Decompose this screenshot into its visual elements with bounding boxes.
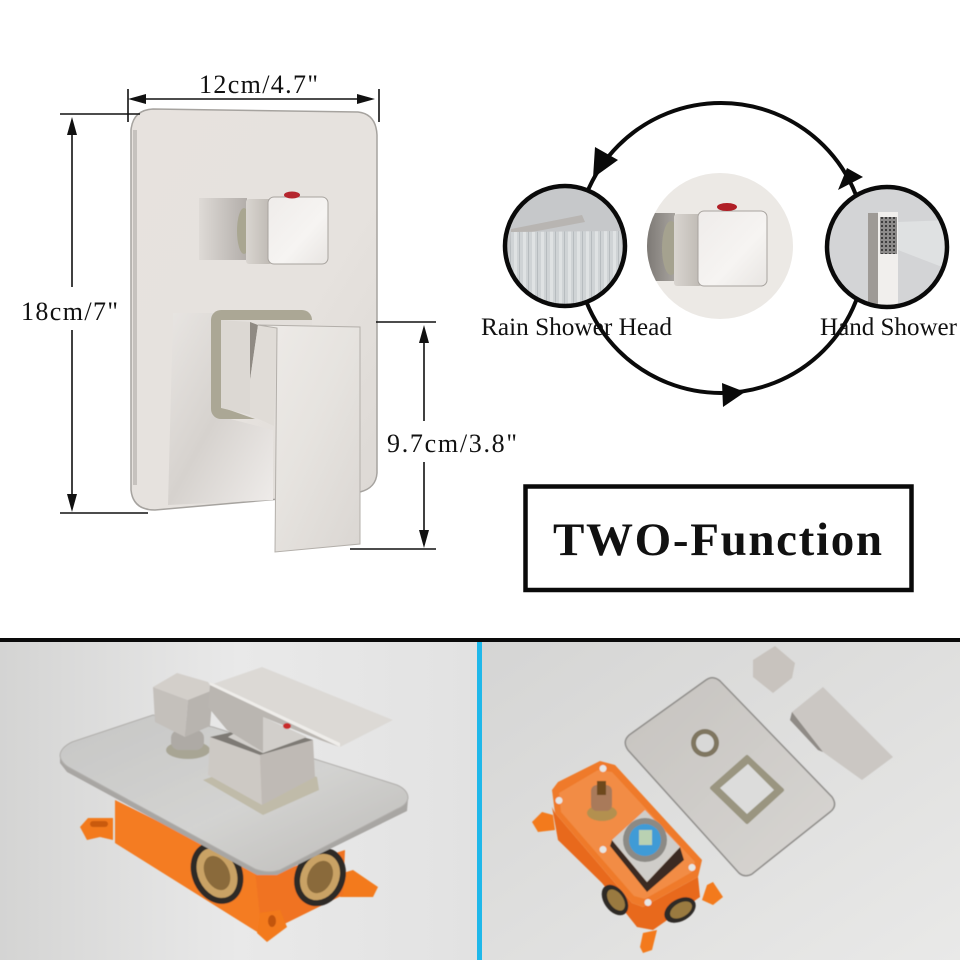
metal cartridge: [610, 840, 684, 892]
screws: [556, 765, 696, 906]
center knob image: [645, 173, 793, 319]
faucet plate: [131, 109, 377, 510]
loose lever: [790, 687, 893, 780]
dimension: width 12cm: [128, 70, 379, 122]
label: rain shower head: Rain Shower Head: [481, 314, 673, 341]
divider: black horizontal rule: [0, 638, 960, 642]
dimension: lever 9.7cm: 9.7cm/3.8": [387, 429, 517, 458]
diverter knob: [199, 192, 328, 264]
arrow heads: [593, 147, 863, 407]
cycle ring: [576, 103, 866, 393]
label: hand shower: Hand Shower: [820, 314, 958, 341]
lever opening: [712, 757, 782, 822]
diagram: two-function cycle: [481, 103, 958, 407]
diverter knob: [153, 673, 213, 759]
loose knob: [753, 646, 795, 693]
dimension: lever 9.7cm: [350, 322, 517, 549]
ports: [600, 884, 629, 916]
mixer body and lever: [203, 667, 393, 815]
divider: blue vertical rule: [477, 642, 482, 960]
diverter stem: [587, 805, 617, 821]
panel: assembled valve photo: [0, 642, 477, 960]
dimension: height 18cm: [21, 114, 148, 513]
orange box: [532, 761, 723, 953]
panel: disassembled parts photo: [482, 642, 960, 960]
rain shower head circle: [505, 186, 630, 320]
panel: faucet front view: [131, 109, 377, 552]
knob hole: [691, 729, 719, 757]
hand shower circle: [827, 187, 950, 308]
dimension: width 12cm: 12cm/4.7": [199, 70, 318, 99]
callout: TWO-Function: TWO-Function: [553, 514, 882, 566]
orange valve body: [80, 800, 378, 942]
callout: TWO-Function: [526, 486, 912, 590]
dimension: height 18cm: 18cm/7": [21, 297, 118, 326]
wall plate: [625, 678, 835, 876]
mixer lever handle: [168, 310, 360, 552]
steel plate: [60, 715, 408, 875]
